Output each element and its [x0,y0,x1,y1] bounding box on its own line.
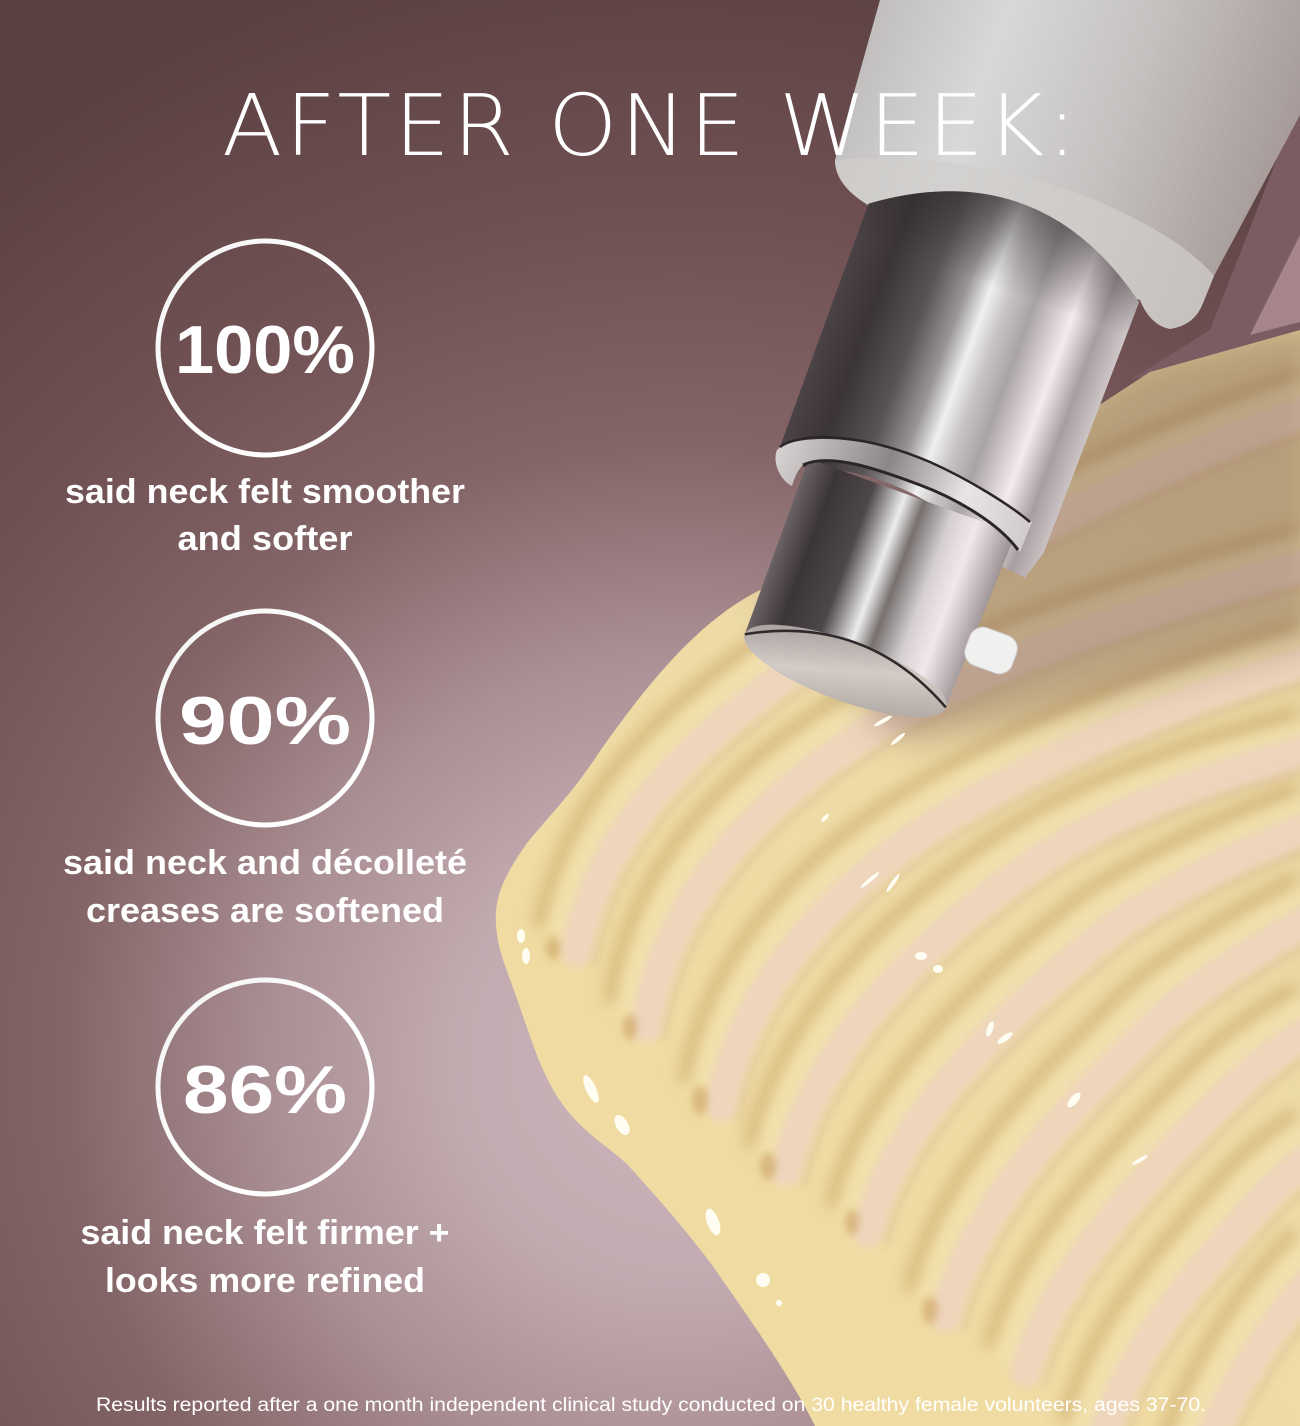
stat ring [158,241,372,455]
stat: 90% [63,611,467,930]
background light area right of tube shadow [1250,235,1300,335]
top shading on cylinder [819,154,1157,438]
nozzle rim [745,606,956,707]
stat label: said neck felt firmer + [80,1214,449,1252]
stat label: looks more refined [105,1262,425,1300]
tube seam shelf [835,158,1214,329]
rim inner edge [803,461,1018,550]
upper metal cylinder [767,154,1157,582]
stat: 86% [80,980,449,1300]
rim dark edge [780,437,1030,522]
stat label: creases are softened [86,892,444,930]
stat ring [158,611,372,825]
stat label: and softer [178,520,352,558]
stat number: 86% [183,1052,347,1128]
cream ridges and valleys [540,320,1300,1426]
product: pump bottle [705,0,1300,752]
nozzle end face [735,606,956,736]
footnote: Results reported after a one month independent clinical study conducted on 30 healthy female volunteers, ages 37-70. [96,1395,1206,1416]
metal pump [705,154,1162,752]
metal rim between cylinders [775,439,1032,552]
white tube [835,0,1300,329]
stat number: 100% [175,312,355,388]
lower metal cylinder [740,459,1015,722]
stat: 100% [65,241,465,558]
title: AFTER ONE WEEK: [222,77,1080,176]
stat ring [158,980,372,1194]
cream swirl [496,320,1300,1426]
stat label: said neck felt smoother [65,473,465,511]
background shadow behind tube [1130,100,1300,380]
shadow from the pump on cream [760,320,1300,740]
cream base shape [496,330,1300,1426]
glossy highlights [517,714,1149,1306]
stat number: 90% [179,683,351,759]
warm creases at stroke tips [546,936,938,1324]
stat label: said neck and décolleté [63,844,467,882]
white nub [961,623,1021,678]
